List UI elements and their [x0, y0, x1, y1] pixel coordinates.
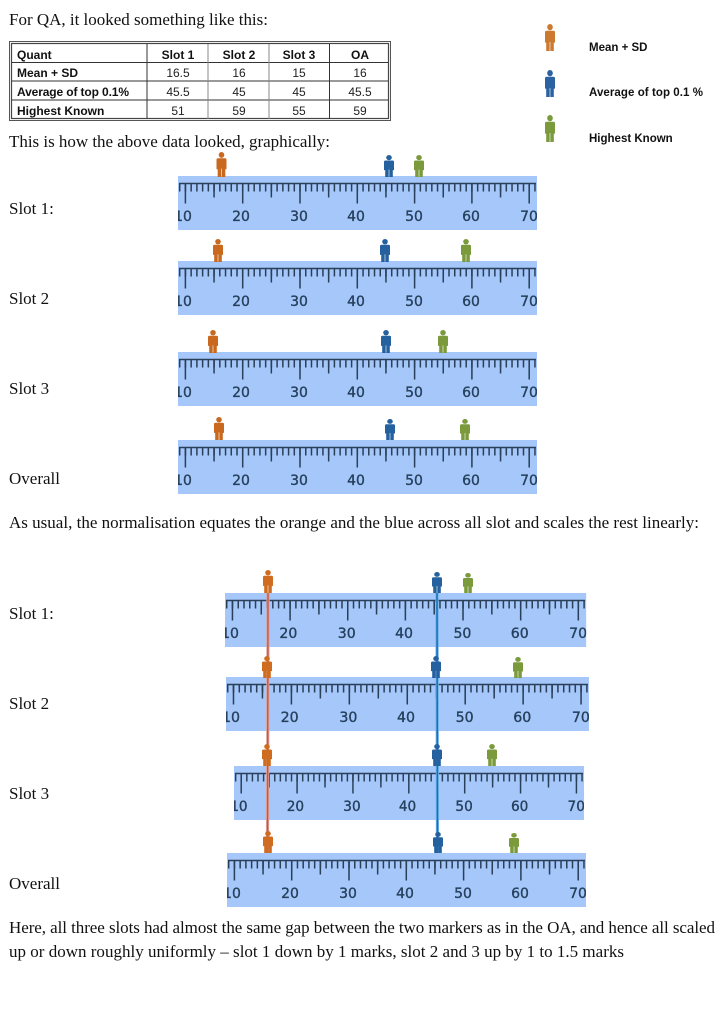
normalised ruler: slot 1: 30 [338, 626, 356, 642]
subheading: This is how the above data looked, graphically: [9, 132, 330, 151]
ruler: overall: 60 [462, 473, 480, 489]
label: slot 3: Slot 3 [9, 379, 49, 398]
ruler: overall: 30 [290, 473, 308, 489]
data table: 15 [292, 66, 306, 80]
normalised markers: slot 2 [262, 656, 523, 678]
normalised ruler: overall: 70 [569, 886, 587, 902]
data table: 45 [232, 85, 246, 99]
data table: Average of top 0.1% [17, 85, 129, 99]
ruler: overall: 70 [520, 473, 538, 489]
ruler: slot 3: 70 [520, 385, 538, 401]
normalised ruler: overall: 30 [339, 886, 357, 902]
normalised ruler: overall [223, 853, 587, 907]
ruler: slot 2: 50 [405, 294, 423, 310]
ruler: slot 3: 40 [347, 385, 365, 401]
legend: Average of top 0.1 % [589, 87, 703, 99]
normalised ruler: slot 3 [230, 766, 585, 820]
ruler: slot 2: 20 [232, 294, 250, 310]
normalised ruler: slot 1: 50 [453, 626, 471, 642]
ruler: slot 1: 60 [462, 209, 480, 225]
normalised ruler: slot 2: 10 [222, 710, 240, 726]
data table: 45.5 [348, 85, 372, 99]
markers: slot 2 [213, 239, 471, 262]
data table: 45 [292, 85, 306, 99]
conclusion text: Here, all three slots had almost the same gap between the two markers as in the OA, and hence all scaled [9, 918, 716, 937]
normalised ruler: overall: 20 [281, 886, 299, 902]
markers: slot 3 [208, 330, 448, 353]
ruler: slot 1: 50 [405, 209, 423, 225]
normalised markers: overall [263, 831, 519, 853]
normalised ruler: slot 1: 40 [395, 626, 413, 642]
normalised ruler: slot 1: 70 [569, 626, 587, 642]
ruler: overall: 20 [232, 473, 250, 489]
ruler: overall [174, 440, 538, 494]
ruler: slot 3: 30 [290, 385, 308, 401]
ruler: slot 1: 40 [347, 209, 365, 225]
ruler: slot 2: 40 [347, 294, 365, 310]
legend: Mean + SD [589, 42, 647, 54]
intro text: For QA, it looked something like this: [9, 10, 268, 29]
alignment line: orange [266, 593, 270, 853]
normalised ruler: slot 1: 60 [511, 626, 529, 642]
data table: 51 [171, 104, 185, 118]
normalised ruler: slot 3: 40 [399, 799, 416, 815]
ruler: slot 1: 10 [174, 209, 192, 225]
ruler: slot 2: 70 [520, 294, 538, 310]
data table: Slot 2 [223, 48, 256, 62]
data table: OA [351, 48, 369, 62]
ruler: slot 1: 30 [290, 209, 308, 225]
data table: Slot 3 [283, 48, 316, 62]
data table: Slot 1 [162, 48, 195, 62]
label: normalised slot 1: Slot 1: [9, 604, 54, 623]
normalised ruler: overall: 50 [454, 886, 472, 902]
normalised ruler: slot 3: 30 [343, 799, 361, 815]
label: slot 2: Slot 2 [9, 289, 49, 308]
data table: Mean + SD [17, 66, 78, 80]
data table: 45.5 [166, 85, 190, 99]
normalised ruler: slot 1: 10 [221, 626, 239, 642]
ruler: slot 3: 60 [462, 385, 480, 401]
normalised ruler: slot 3: 20 [287, 799, 304, 815]
ruler: slot 1: 20 [232, 209, 250, 225]
label: overall: Overall [9, 469, 60, 488]
ruler: slot 2: 60 [462, 294, 480, 310]
normalised ruler: slot 2 [222, 677, 590, 731]
normalised ruler: slot 2: 40 [397, 710, 415, 726]
normalised markers: slot 1 [263, 570, 473, 593]
normalised ruler: slot 2: 30 [339, 710, 357, 726]
label: normalised slot 3: Slot 3 [9, 784, 49, 803]
label: slot 1: Slot 1: [9, 199, 54, 218]
data table [10, 42, 390, 120]
normalised ruler: slot 3: 60 [511, 799, 528, 815]
data table: 59 [353, 104, 367, 118]
ruler: overall: 40 [347, 473, 365, 489]
ruler: overall: 50 [405, 473, 423, 489]
conclusion text [9, 918, 716, 961]
ruler: slot 3: 50 [405, 385, 423, 401]
normalised ruler: overall: 10 [223, 886, 241, 902]
ruler: slot 3 [174, 352, 538, 406]
conclusion text: up or down roughly uniformly – slot 1 down by 1 marks, slot 2 and 3 up by 1 to 1.5 marks [9, 942, 624, 961]
ruler: slot 2: 10 [174, 294, 192, 310]
data table: 16.5 [166, 66, 190, 80]
normalisation explanation: As usual, the normalisation equates the orange and the blue across all slot and scales the rest linearly: [9, 513, 699, 532]
normalised ruler: slot 3: 50 [455, 799, 473, 815]
label: normalised slot 2: Slot 2 [9, 694, 49, 713]
data table: 16 [232, 66, 246, 80]
normalised ruler: slot 3: 10 [230, 799, 248, 815]
normalised ruler: slot 2: 20 [281, 710, 299, 726]
data table: 16 [353, 66, 367, 80]
normalised ruler: slot 1 [221, 593, 587, 647]
markers: overall [214, 417, 470, 440]
ruler: slot 3: 20 [232, 385, 250, 401]
legend: Highest Known [589, 133, 673, 145]
normalised ruler: slot 2: 50 [456, 710, 474, 726]
label: normalised overall: Overall [9, 874, 60, 893]
normalised ruler: slot 3: 70 [568, 799, 585, 815]
ruler: slot 2 [174, 261, 538, 315]
normalised ruler: overall: 60 [511, 886, 529, 902]
ruler: slot 1: 70 [520, 209, 538, 225]
legend [545, 24, 703, 145]
normalised ruler: slot 2: 60 [513, 710, 531, 726]
markers: slot 1 [216, 152, 424, 177]
ruler: slot 3: 10 [174, 385, 192, 401]
data table: Highest Known [17, 104, 104, 118]
normalised ruler: slot 2: 70 [572, 710, 590, 726]
data table: Quant [17, 48, 52, 62]
ruler: overall: 10 [174, 473, 192, 489]
ruler: slot 2: 30 [290, 294, 308, 310]
normalised markers: slot 3 [262, 744, 497, 766]
alignment line: blue [435, 593, 439, 853]
normalised ruler: overall: 40 [396, 886, 414, 902]
normalised ruler: slot 1: 20 [279, 626, 297, 642]
ruler: slot 1 [174, 176, 538, 230]
data table: 55 [292, 104, 306, 118]
data table: 59 [232, 104, 246, 118]
